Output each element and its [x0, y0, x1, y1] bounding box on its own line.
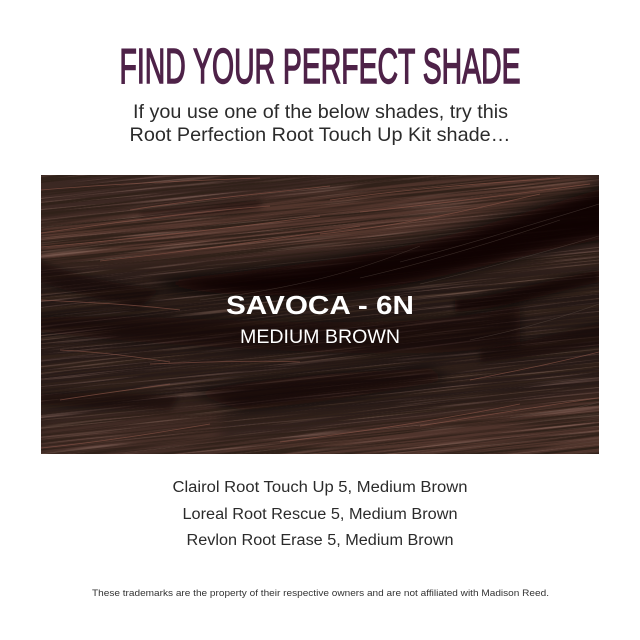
intro text: If you use one of the below shades, try this [133, 101, 508, 123]
intro text: Root Perfection Root Touch Up Kit shade… [130, 124, 510, 146]
shade name: SAVOCA - 6N [226, 292, 414, 320]
equivalent shades list: Revlon Root Erase 5, Medium Brown [186, 532, 454, 549]
individual strands [41, 178, 599, 448]
trademark disclaimer: These trademarks are the property of their respective owners and are not affiliated with Madison Reed. [92, 588, 549, 599]
equivalent shades list [172, 479, 467, 549]
equivalent shades list: Loreal Root Rescue 5, Medium Brown [182, 506, 458, 523]
hair colour swatch image [41, 175, 599, 454]
intro text [130, 101, 510, 146]
hair strand texture [41, 175, 599, 454]
shade descriptor: MEDIUM BROWN [240, 327, 400, 348]
equivalent shades list: Clairol Root Touch Up 5, Medium Brown [172, 479, 467, 496]
warm highlight bands [41, 175, 610, 456]
dark shadow bands [30, 186, 610, 410]
